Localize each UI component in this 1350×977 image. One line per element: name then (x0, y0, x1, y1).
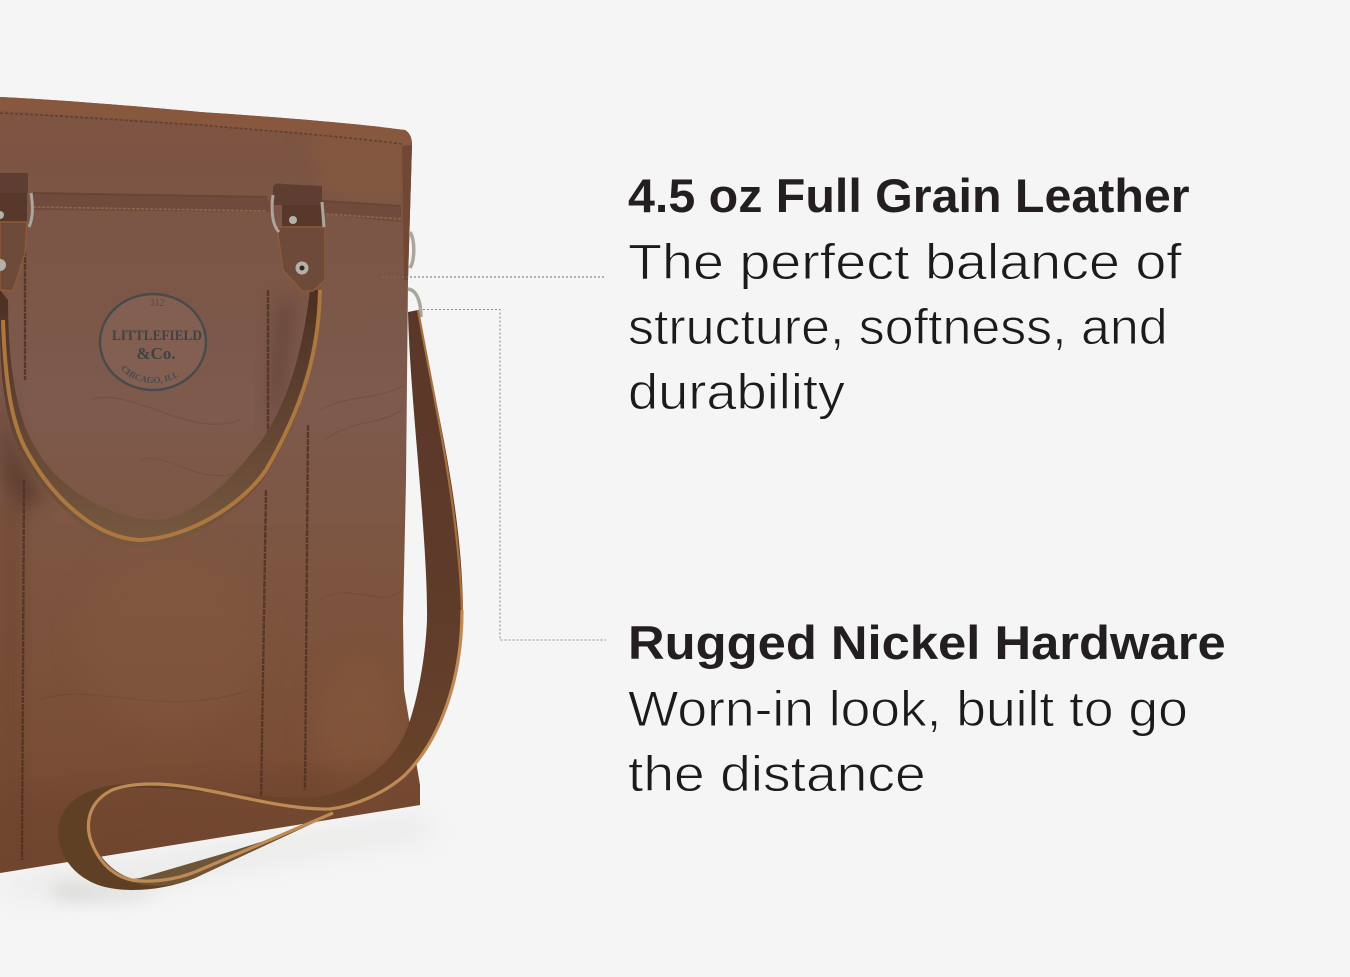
left handle tab (0, 173, 28, 291)
heading: hardware: Rugged Nickel Hardware (628, 617, 1226, 670)
body: leather: structure, softness, and (628, 298, 1168, 355)
top stitching (0, 113, 402, 144)
strap back surface (125, 813, 332, 886)
leather wrinkles (40, 385, 404, 702)
body: leather: durability (628, 363, 845, 420)
strap tan edge (88, 610, 462, 881)
body: hardware: the distance (628, 745, 926, 802)
text block: hardware (628, 617, 1226, 802)
handle (0, 290, 322, 548)
heading: leather: 4.5 oz Full Grain Leather (628, 170, 1190, 223)
metal rings (29, 193, 421, 317)
logo stamp: 312 (150, 298, 164, 309)
body: leather (628, 233, 1182, 420)
logo stamp: &Co. (136, 344, 176, 363)
logo stamp (98, 292, 208, 392)
right handle tab (273, 183, 325, 291)
shoulder strap (58, 310, 463, 890)
seams (22, 250, 308, 860)
bag body (0, 97, 420, 873)
body: leather: The perfect balance of (628, 233, 1182, 290)
bag shadow (0, 815, 440, 897)
illustration: leather tote bag (0, 97, 464, 907)
side panel (402, 145, 412, 280)
pocket edge shadow (33, 193, 401, 206)
body: hardware: Worn-in look, built to go (628, 680, 1188, 737)
top rim (0, 97, 412, 146)
text block: leather (628, 170, 1190, 420)
strap loop (58, 783, 335, 890)
leather tone variations (0, 302, 420, 873)
logo stamp: LITTLEFIELD (112, 328, 202, 344)
pocket band (33, 193, 401, 222)
logo stamp: CHICAGO, ILL (122, 366, 179, 384)
body: hardware (628, 680, 1188, 802)
pocket stitching (33, 207, 401, 219)
